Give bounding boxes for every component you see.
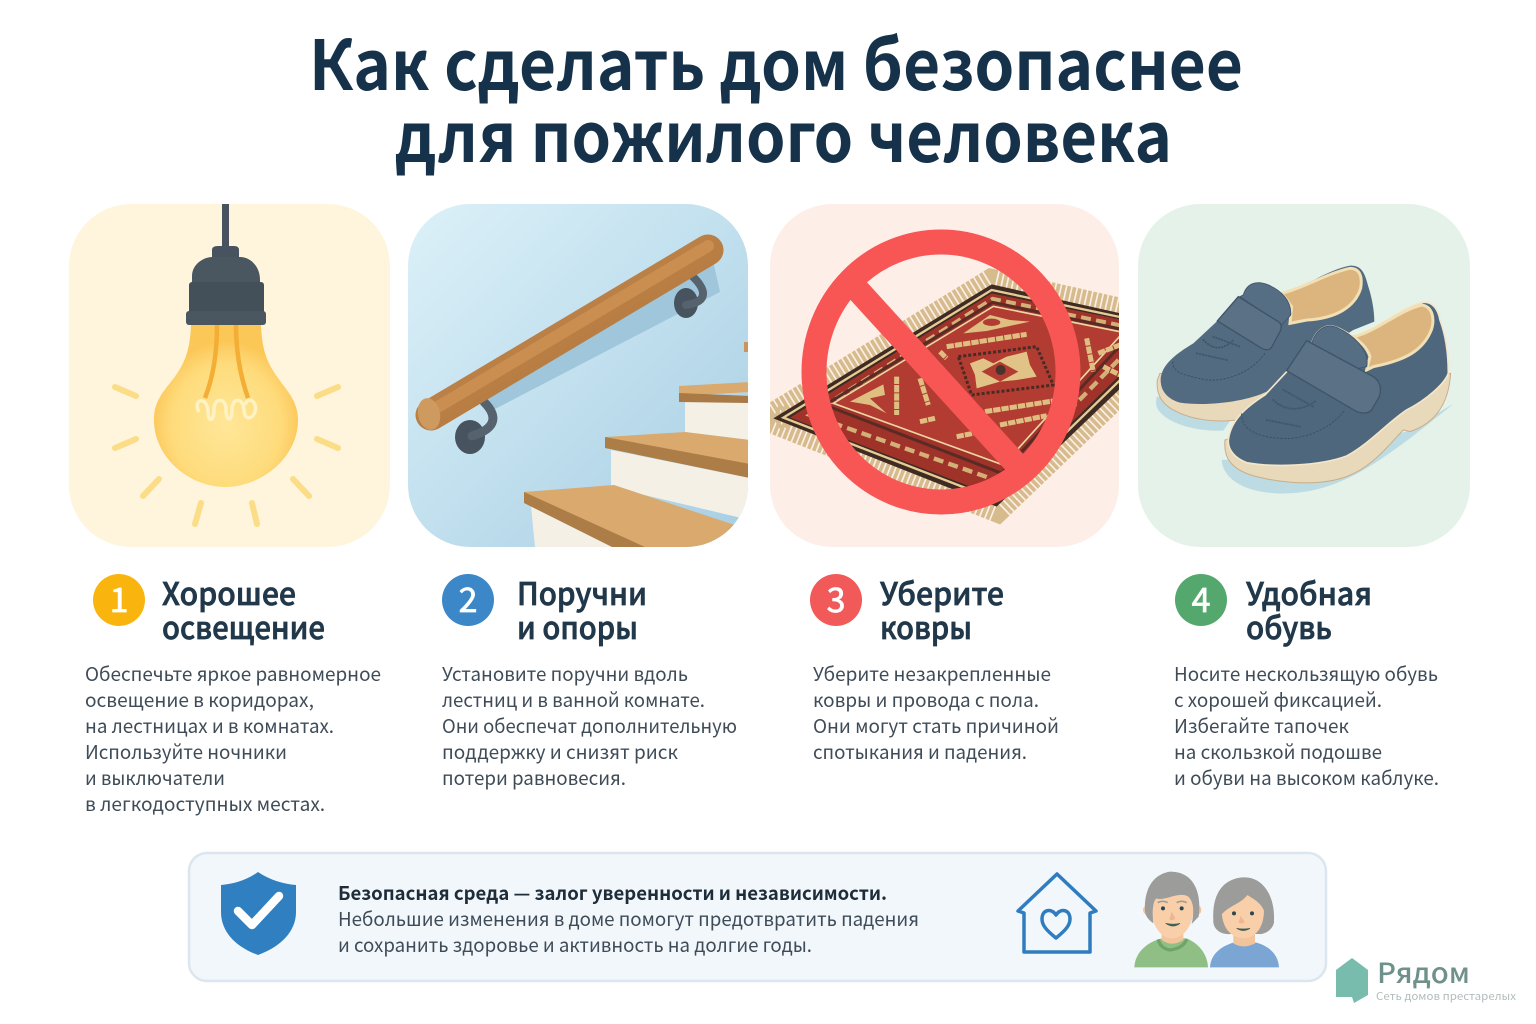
panel: handrail illustration [408, 204, 750, 547]
text: handrails: Установите поручни вдоль [442, 660, 688, 687]
text: handrails: лестниц и в ванной комнате. [442, 686, 705, 713]
icon: upper bracket [674, 274, 703, 318]
callout text: Небольшие изменения в доме помогут предотвратить падения [338, 905, 919, 932]
icon: stairs [524, 342, 750, 547]
logo name: Рядом [1377, 952, 1470, 992]
icon: front shoe [1222, 302, 1454, 493]
text: lighting: Используйте ночники [85, 738, 287, 765]
heading: rugs: ковры [880, 603, 972, 648]
icon: house with heart [1018, 874, 1096, 952]
number badge 4 [1175, 573, 1227, 626]
text: handrails [442, 660, 737, 791]
callout text: Безопасная среда — залог уверенности и независимости. [338, 879, 887, 906]
text: rugs: Уберите незакрепленные [813, 660, 1051, 687]
text: lighting: Обеспечьте яркое равномерное [85, 660, 381, 687]
text: rugs: ковры и провода с пола. [813, 686, 1039, 713]
text: lighting [85, 660, 381, 817]
text: lighting: на лестницах и в комнатах. [85, 712, 334, 739]
logo tagline: Сеть домов престарелых [1376, 988, 1517, 1004]
text: footwear: Избегайте тапочек [1174, 712, 1349, 739]
column 1: lighting [85, 569, 381, 817]
number badge 1: 1 [110, 573, 128, 622]
text: rugs: Они могут стать причиной [813, 712, 1059, 739]
icon: elderly woman [1210, 877, 1279, 967]
callout text: и сохранить здоровье и активность на долгие годы. [338, 931, 812, 958]
text: handrails: поддержку и снизят риск [442, 738, 678, 765]
heading: rugs: Уберите [880, 569, 1004, 614]
text: footwear [1174, 660, 1439, 791]
icon: lower bracket [455, 402, 493, 454]
text: footwear: Носите нескользящую обувь [1174, 660, 1438, 687]
heading: footwear: Удобная [1246, 569, 1372, 614]
column 4: footwear [1174, 569, 1439, 791]
text: footwear: и обуви на высоком каблуке. [1174, 764, 1439, 791]
icon: light rays [115, 387, 338, 524]
panel: light bulb illustration [69, 204, 390, 547]
icon: hanging bulb [154, 204, 298, 487]
icon: wooden handrail [415, 246, 708, 432]
title: Как сделать дом безопаснее [309, 10, 1243, 110]
text: handrails: потери равновесия. [442, 764, 626, 791]
icon: shield with check [221, 872, 296, 955]
icon: logo house [1336, 958, 1368, 1003]
heading: lighting: Хорошее [162, 569, 296, 614]
text: lighting: в легкодоступных местах. [85, 790, 325, 817]
callout text [338, 879, 919, 958]
number badge 2 [442, 573, 494, 626]
heading: footwear [1246, 569, 1372, 648]
text: footwear: на скользкой подошве [1174, 738, 1382, 765]
number badge 1 [93, 573, 145, 626]
icon: prohibition sign [814, 242, 1068, 502]
number badge 2: 2 [459, 573, 477, 622]
text: lighting: и выключатели [85, 764, 225, 791]
text: rugs: спотыкания и падения. [813, 738, 1027, 765]
logo [1336, 952, 1517, 1004]
heading: lighting: освещение [162, 603, 325, 648]
title [309, 10, 1243, 182]
heading: handrails: и опоры [517, 603, 638, 648]
text: footwear: с хорошей фиксацией. [1174, 686, 1382, 713]
heading: handrails [517, 569, 647, 648]
title: для пожилого человека [395, 82, 1172, 182]
heading: rugs [880, 569, 1004, 648]
heading: footwear: обувь [1246, 603, 1332, 648]
text: rugs [813, 660, 1059, 765]
panel: no rugs illustration [770, 204, 1119, 547]
number badge 3: 3 [827, 573, 845, 622]
number badge 4: 4 [1192, 573, 1210, 622]
number badge 3 [810, 573, 862, 626]
icon: back shoe [1156, 266, 1374, 431]
icon: elderly man [1134, 872, 1208, 967]
column 2: handrails [442, 569, 737, 791]
column 3: rugs [810, 569, 1059, 765]
text: handrails: Они обеспечат дополнительную [442, 712, 737, 739]
heading: lighting [162, 569, 325, 648]
text: lighting: освещение в коридорах, [85, 686, 314, 713]
heading: handrails: Поручни [517, 569, 647, 614]
panel: shoes illustration [1138, 204, 1470, 547]
panel: bottom callout [189, 853, 1326, 981]
icon: red patterned rug [773, 284, 1184, 507]
